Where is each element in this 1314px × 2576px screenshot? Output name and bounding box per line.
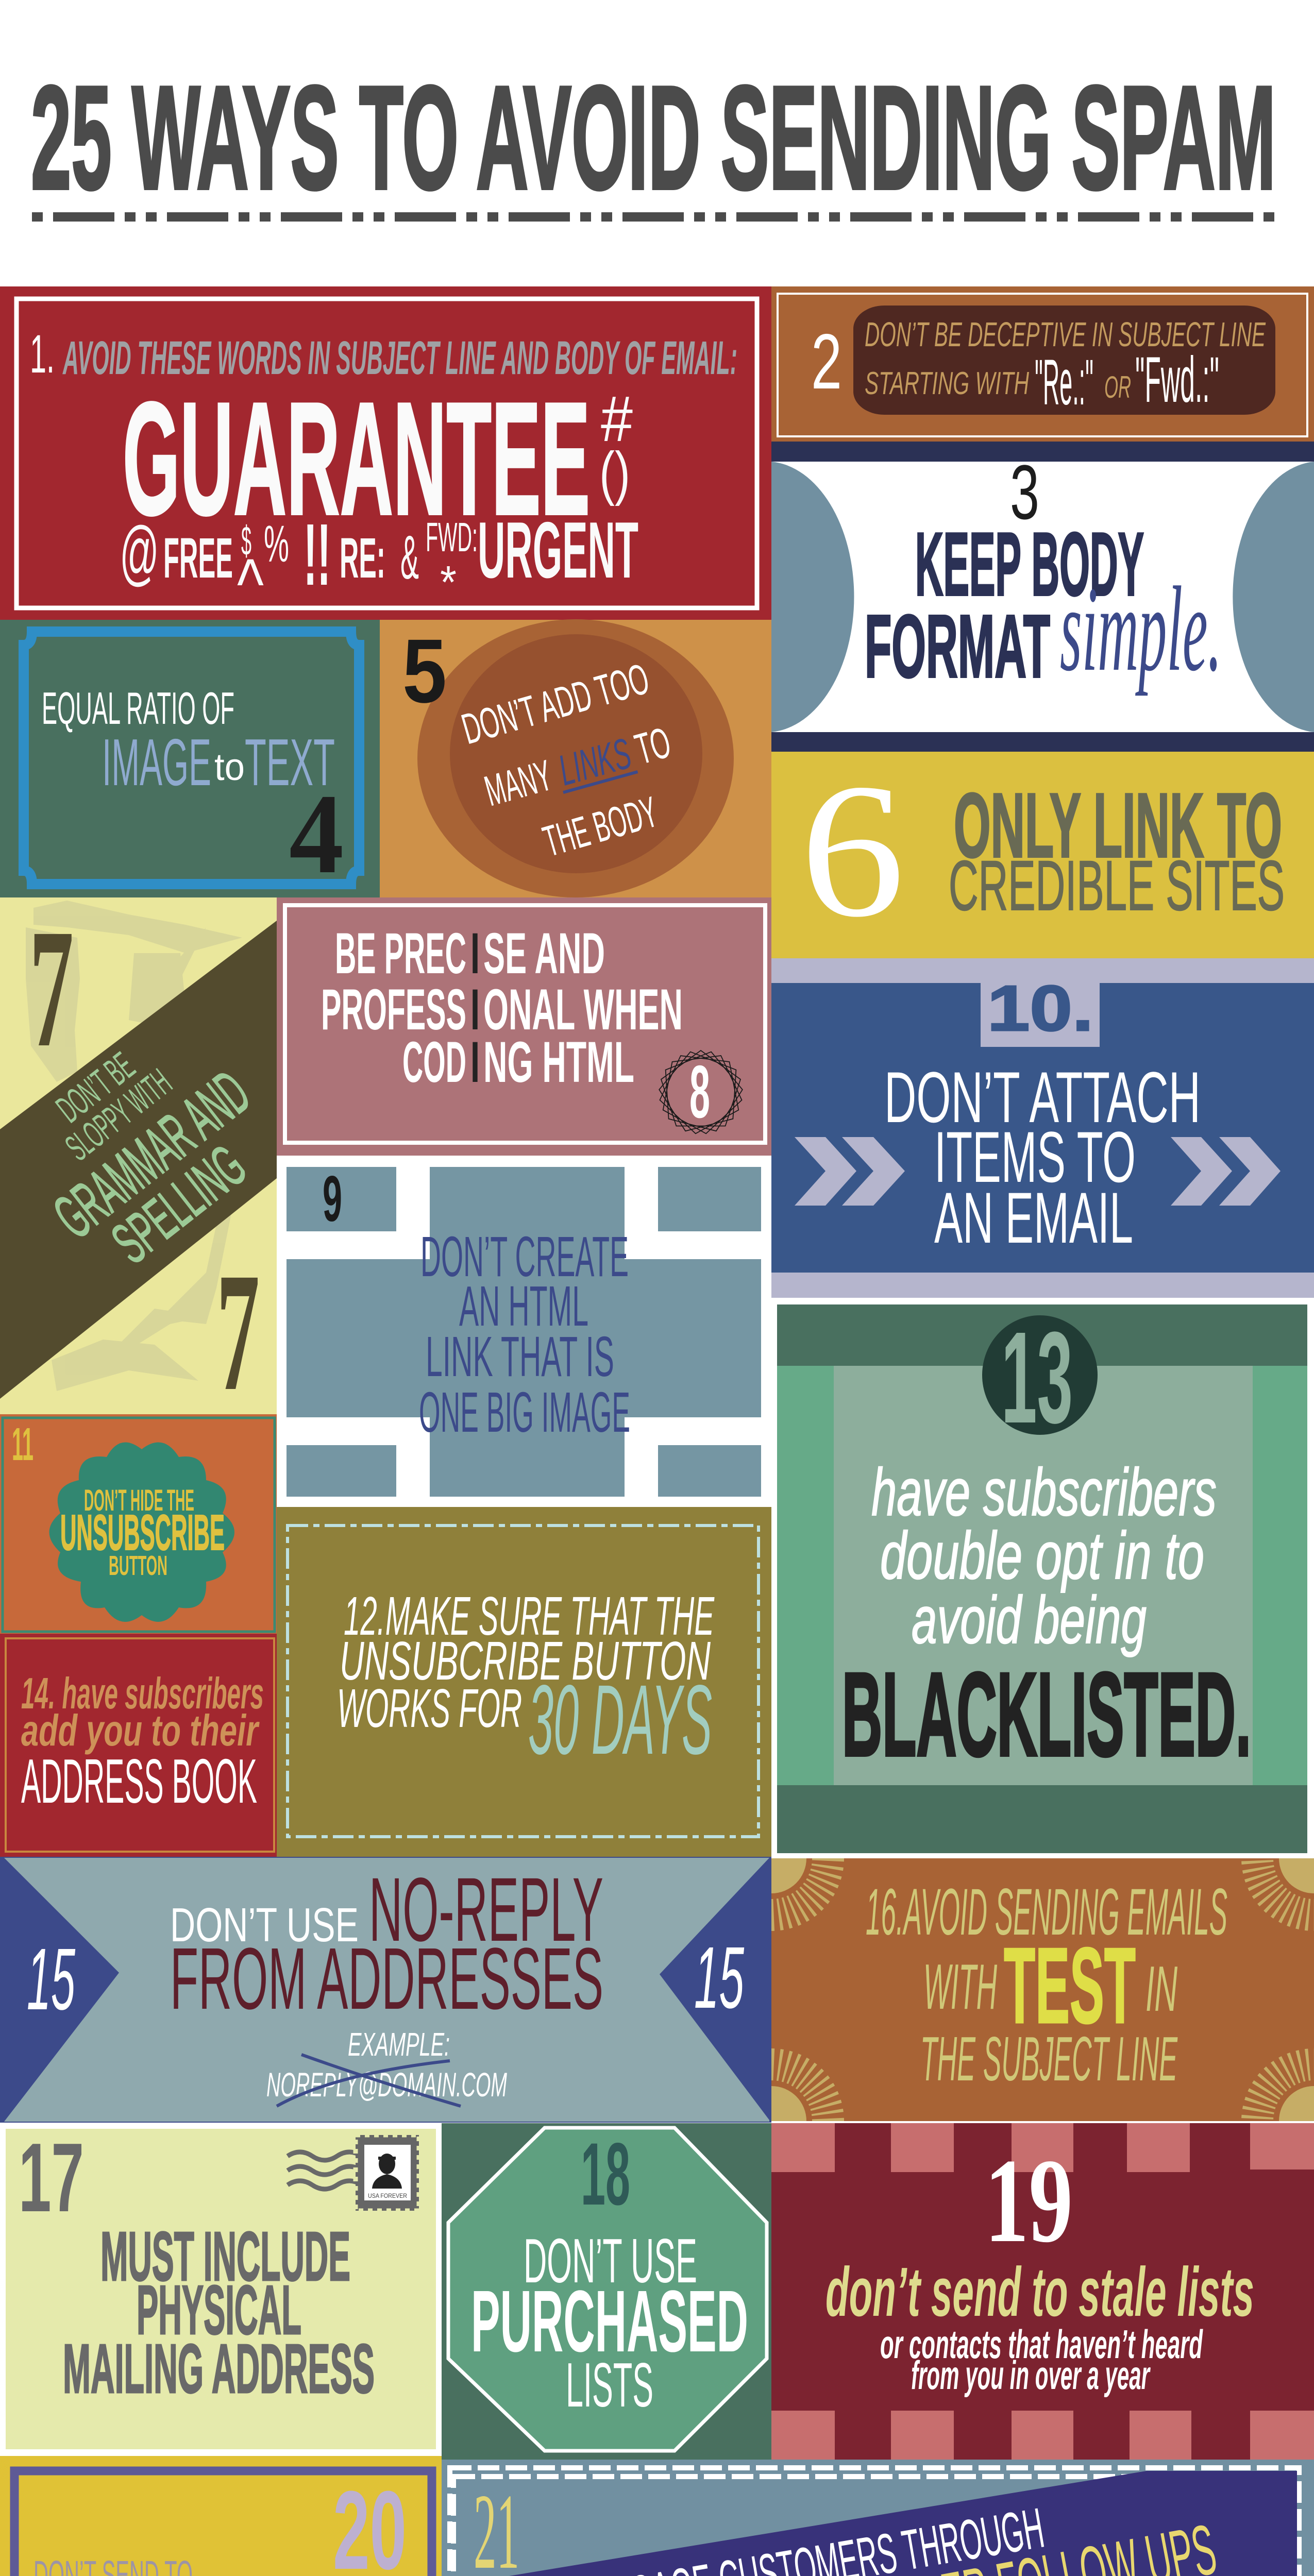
spam words cluster: % [264,515,289,573]
number 3: 3 [1010,449,1039,535]
panel: 16 avoid test [771,1858,1314,2121]
panel: 9 big image link: ONE BIG IMAGE [419,1381,630,1444]
text: don't use purchased lists [471,2226,748,2420]
panel: 16 avoid test: IN [1145,1954,1177,2025]
icon: stamp: USA FOREVER [368,2192,407,2199]
text: be precise and professional: PROFESS [321,977,466,1042]
text: don't be sloppy: SPELLING [100,1133,258,1276]
panel: 5 don't add too many links: LINKS [553,729,636,795]
number 10: 10. [987,973,1093,1044]
panel: 9 big image link [277,1156,771,1507]
panel: 2 don't be deceptive [771,286,1314,442]
text: be precise and professional: SE AND [483,921,605,986]
text: be precise and professional: I [470,977,480,1042]
text: must include physical mailing address: MUST INCLUDE [100,2217,350,2295]
panel: 11 don't hide unsubscribe: UNSUBSCRIBE [60,1504,225,1561]
text: have subscribers double opt in [871,1454,1217,1657]
panel: 19 stale lists [771,2123,1314,2460]
panel: 12 unsubscribe 30 days [277,1507,771,1857]
text: be precise and professional: ONAL WHEN [483,977,683,1042]
panel: 5 don't add too many links: TO [630,718,676,773]
panel: 3 keep body format simple: FORMAT [865,596,1050,696]
panel: 6 only link to credible sites [771,744,1314,958]
text: have subscribers double opt in: avoid being [912,1582,1147,1657]
panel: 15 no-reply addresses: NO-REPLY [369,1859,603,1960]
text: don't use purchased lists: DON’T USE [524,2226,697,2296]
icon: left chevrons [795,1137,905,1206]
panel: 17 physical mailing address: MAILING ADDRESS [63,2330,375,2408]
panel: 11 don't hide unsubscribe [0,1414,277,1635]
panel: 5 don't add too many links: THE BODY [538,787,663,866]
text: make sure unsubscribe works [337,1586,715,1739]
panel: 10 don't attach items: AN EMAIL [934,1177,1133,1258]
spam words cluster: ^ [237,544,264,624]
text: must include physical mailing address: PHYSICAL [137,2271,301,2349]
panel: 14 address book: ADDRESS BOOK [21,1746,257,1816]
text: make sure unsubscribe works: UNSUBCRIBE BUTTON [340,1631,711,1691]
badge: 13: 13 [1001,1304,1073,1450]
panel: 5 don't add too many links: MANY [480,751,557,815]
number 7 bottom: 7 [216,1238,260,1426]
text: be precise and professional: BE PREC [335,921,466,986]
number 1: 1. [30,324,55,384]
panel: 18 purchased lists [442,2123,771,2460]
panel: 8 be precise: 8 [689,1050,710,1133]
spam words cluster: * [440,557,457,608]
panel: 3 keep body format simple [771,442,1314,752]
text: don't add too many links: DON’T ADD TOO [457,654,654,753]
panel: 15 no-reply addresses: FROM ADDRESSES [170,1930,603,2028]
panel: 15 no-reply addresses: NOREPLY@DOMAIN.COM [266,2065,507,2104]
panel: 4 equal ratio [0,620,380,897]
spam words cluster: !! [304,506,331,604]
panel: 10 don't attach items [771,958,1314,1298]
icon: stamp [356,2135,419,2211]
text: don't hide the unsubscribe button: BUTTON [109,1550,167,1581]
text: don't be sloppy [41,1044,263,1276]
text: be precise and professional: I [470,1030,480,1094]
spam words cluster: RE: [340,527,385,590]
icon: right chevrons [1171,1137,1281,1206]
icon: postmark waves [288,2152,362,2189]
panel: 16 avoid test: WITH [923,1952,997,2023]
panel: 14 address book [0,1634,277,1857]
panel: 10 don't attach items: ITEMS TO [934,1116,1136,1197]
panel: 12 unsubscribe 30 days: 30 DAYS [528,1664,712,1775]
text: don't be sloppy: DON’T BE [48,1044,143,1131]
text: don't use no-reply: DON’T USE [170,1898,359,1952]
icon: spirograph ring [649,1035,759,1144]
panel: 8 be precise [277,897,771,1156]
text: make sure unsubscribe works: WORKS FOR [337,1678,522,1739]
text: don't be sloppy: GRAMMAR AND [41,1058,263,1252]
panel: 11 don't hide unsubscribe: 11 [12,1419,33,1470]
panel: 1 avoid these words [0,286,771,624]
text: be precise and professional: NG HTML [483,1030,634,1094]
panel: 15 no-reply addresses: 15 [27,1930,75,2028]
spam words cluster: FREE [163,527,233,590]
text: don't create html link: DON’T CREATE [420,1225,629,1289]
panel: 2 don't be deceptive: STARTING WITH [865,366,1029,401]
badge [49,1443,234,1622]
number 5: 5 [402,621,447,722]
text: have subscribers add you: 14. have subscribers [21,1669,264,1718]
panel: 13 double opt in [771,1298,1314,1858]
text: don't create html link: LINK THAT IS [426,1325,614,1388]
text: equal ratio of image to text: EQUAL RATIO OF [42,683,234,734]
number 15 right: 15 [694,1929,744,2027]
panel: 5 don't add too many links [380,619,771,897]
text: make sure unsubscribe works: 12.MAKE SURE THAT THE [344,1586,715,1647]
text: don't hide the unsubscribe button [60,1484,225,1581]
spam words cluster: # [601,383,633,455]
text: be precise and professional [321,921,683,1094]
number 2: 2 [811,318,842,405]
text: don't hide the unsubscribe button: DON’T HIDE THE [84,1484,194,1517]
number 7 top: 7 [29,894,74,1082]
panel: 17 physical mailing address [0,2123,442,2456]
panel: 14 address book: add you to their [21,1706,260,1755]
panel: 20 bounced emails [0,2456,442,2576]
text: must include physical mailing address [63,2217,375,2408]
panel: 2 don't be deceptive: "Re.:" [1035,347,1093,418]
spam words cluster: $ [241,518,251,564]
number 17: 17 [19,2123,84,2232]
spam words cluster: () [599,439,630,506]
number 19: 19 [985,2133,1073,2267]
panel: 4 equal ratio: to [214,745,245,788]
panel: 4 equal ratio: IMAGE [102,725,211,800]
panel: 1 avoid these words: GUARANTEE [123,369,590,549]
text: don't be sloppy: SLOPPY WITH [58,1061,179,1169]
text: don't use purchased lists: LISTS [566,2350,653,2420]
text: example: EXAMPLE: [348,2026,450,2063]
text: be precise and professional: COD [402,1030,466,1094]
panel: 2 don't be deceptive: OR [1104,370,1131,404]
panel: 16 avoid test: TEST [1004,1926,1136,2046]
number 4: 4 [289,771,344,897]
number 9: 9 [323,1163,342,1235]
panel: 21 engage customers [442,2460,1314,2576]
panel: 18 purchased lists: PURCHASED [471,2273,748,2370]
text: don't create html link: AN HTML [459,1275,588,1338]
panel: 7 grammar and spelling [0,894,277,1426]
spam words cluster: FWD: [426,514,478,560]
panel: 4 equal ratio: TEXT [245,725,335,800]
number 6: 6 [800,744,905,957]
panel: 1 avoid these words: URGENT [478,505,638,595]
number 18: 18 [581,2125,630,2224]
text: don't create html link [419,1225,630,1444]
spam words cluster [120,383,638,624]
spam words cluster: & [400,523,419,592]
banner [459,2471,1297,2576]
panel: 15 no-reply addresses [0,1857,771,2123]
icon: cross-out [277,2055,461,2106]
text: be precise and professional: I [470,921,480,986]
badge: 13 [982,1304,1098,1450]
icon: corner suns [771,1858,1314,2121]
spam words cluster: @ [120,512,159,592]
